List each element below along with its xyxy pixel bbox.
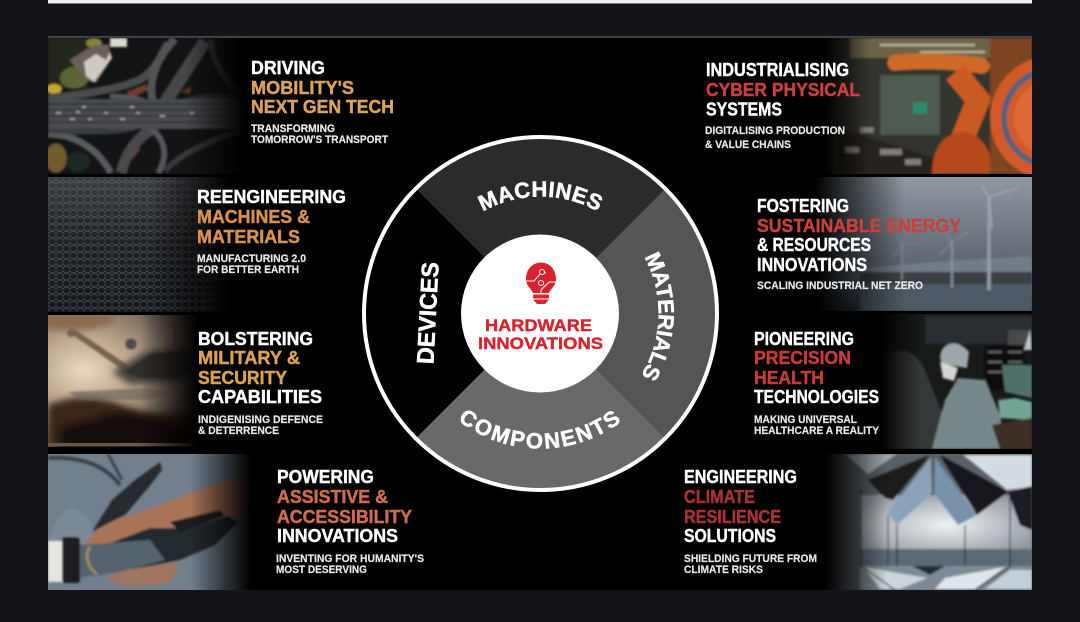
heading: SUSTAINABLE ENERGY: [757, 215, 962, 236]
panel: fostering sustainable energy: [757, 177, 1032, 311]
sector: components: COMPONENTS: [460, 410, 620, 449]
photo: orange robot arm: [832, 38, 1032, 174]
subheading: MOST DESERVING: [276, 564, 367, 576]
heading: RESILIENCE: [684, 506, 781, 527]
sector: machines: MACHINES: [477, 181, 602, 212]
heading: ENGINEERING: [684, 466, 797, 487]
subheading: & DETERRENCE: [198, 425, 279, 437]
outer white ring: [364, 137, 717, 490]
heading: [198, 328, 322, 407]
subheading: TOMORROW'S TRANSPORT: [251, 134, 388, 146]
subheading: SHIELDING FUTURE FROM: [684, 553, 817, 565]
heading: INNOVATIONS: [277, 525, 398, 546]
sector: components: [417, 369, 664, 488]
panel: reengineering machines: [48, 177, 346, 312]
heading: HEALTH: [754, 367, 824, 388]
subheading: [197, 253, 306, 276]
heading: [706, 59, 860, 120]
heading: REENGINEERING: [197, 186, 346, 207]
sector: devices: [364, 189, 540, 438]
heading: NEXT GEN TECH: [251, 96, 394, 117]
subheading: TRANSFORMING: [251, 123, 335, 135]
panel: powering assistive: [48, 454, 424, 590]
subheading: INVENTING FOR HUMANITY'S: [276, 553, 424, 565]
heading: MILITARY &: [198, 347, 300, 368]
heading: MOBILITY'S: [251, 77, 354, 98]
subheading: FOR BETTER EARTH: [197, 264, 299, 276]
heading: [754, 328, 879, 407]
subheading: MAKING UNIVERSAL: [754, 414, 857, 426]
subheading: [705, 125, 845, 151]
heading: [277, 466, 413, 546]
subheading: [251, 123, 388, 146]
subheading: DIGITALISING PRODUCTION: [705, 125, 845, 137]
heading: & RESOURCES: [757, 234, 871, 255]
photo: surgeons in theatre: [886, 314, 1032, 449]
photo: aerial highway interchange: [48, 38, 239, 174]
subheading: INDIGENISING DEFENCE: [198, 414, 323, 426]
heading: SYSTEMS: [706, 98, 782, 120]
top white strip: [48, 0, 1032, 4]
heading: POWERING: [277, 466, 374, 487]
photo: glass hexagon reflections: [830, 454, 1032, 590]
sector: materials: [596, 190, 715, 437]
heading: SECURITY: [198, 367, 288, 388]
heading: DRIVING: [251, 57, 325, 78]
heading: [757, 195, 962, 275]
panel: pioneering precision health: [754, 314, 1032, 449]
heading: MACHINES &: [197, 206, 310, 227]
heading: CAPABILITIES: [198, 386, 322, 407]
sector: machines: [418, 139, 664, 258]
heading: INNOVATIONS: [757, 254, 867, 275]
circular diagram: [362, 135, 719, 492]
subheading: [276, 553, 424, 576]
panel: bolstering military: [48, 315, 323, 447]
heading: [251, 57, 394, 117]
subheading: HEALTHCARE A REALITY: [754, 425, 880, 437]
heading: TECHNOLOGIES: [754, 386, 879, 407]
panel: industrialising cyber physical: [705, 38, 1032, 174]
subheading: & VALUE CHAINS: [705, 139, 791, 151]
photo: battle tank in dust: [48, 315, 194, 447]
heading: SOLUTIONS: [684, 525, 776, 546]
heading: ACCESSIBILITY: [277, 506, 413, 527]
centre white circle: [461, 234, 619, 392]
heading: MATERIALS: [197, 226, 300, 247]
centre label: HARDWARE: [485, 316, 592, 335]
panel: driving mobility: [45, 38, 394, 174]
heading: PRECISION: [754, 347, 851, 368]
heading: PIONEERING: [754, 328, 854, 349]
heading: [197, 186, 346, 247]
photo: human hand and robotic hand: [48, 454, 247, 590]
subheading: [754, 414, 880, 437]
heading: CYBER PHYSICAL: [706, 79, 860, 100]
subheading: [684, 553, 817, 576]
heading: ASSISTIVE &: [277, 486, 388, 507]
sector: devices: DEVICES: [412, 261, 445, 365]
sector: materials: MATERIALS: [642, 251, 674, 380]
icon: circuit light bulb: [526, 262, 556, 304]
heading: INDUSTRIALISING: [706, 59, 849, 80]
heading: CLIMATE: [684, 486, 755, 507]
photo: wind turbines: [800, 177, 1032, 311]
heading: FOSTERING: [757, 195, 849, 216]
subheading: [198, 414, 323, 437]
centre label: INNOVATIONS: [478, 334, 603, 353]
panel: engineering climate resilience: [684, 454, 1032, 590]
subheading: MANUFACTURING 2.0: [197, 253, 306, 265]
centre label: [478, 316, 603, 353]
photo: dark mesh material: [48, 177, 223, 312]
heading: [684, 466, 797, 546]
heading: BOLSTERING: [198, 328, 313, 349]
subheading: SCALING INDUSTRIAL NET ZERO: [757, 280, 923, 292]
subheading: CLIMATE RISKS: [684, 564, 763, 576]
